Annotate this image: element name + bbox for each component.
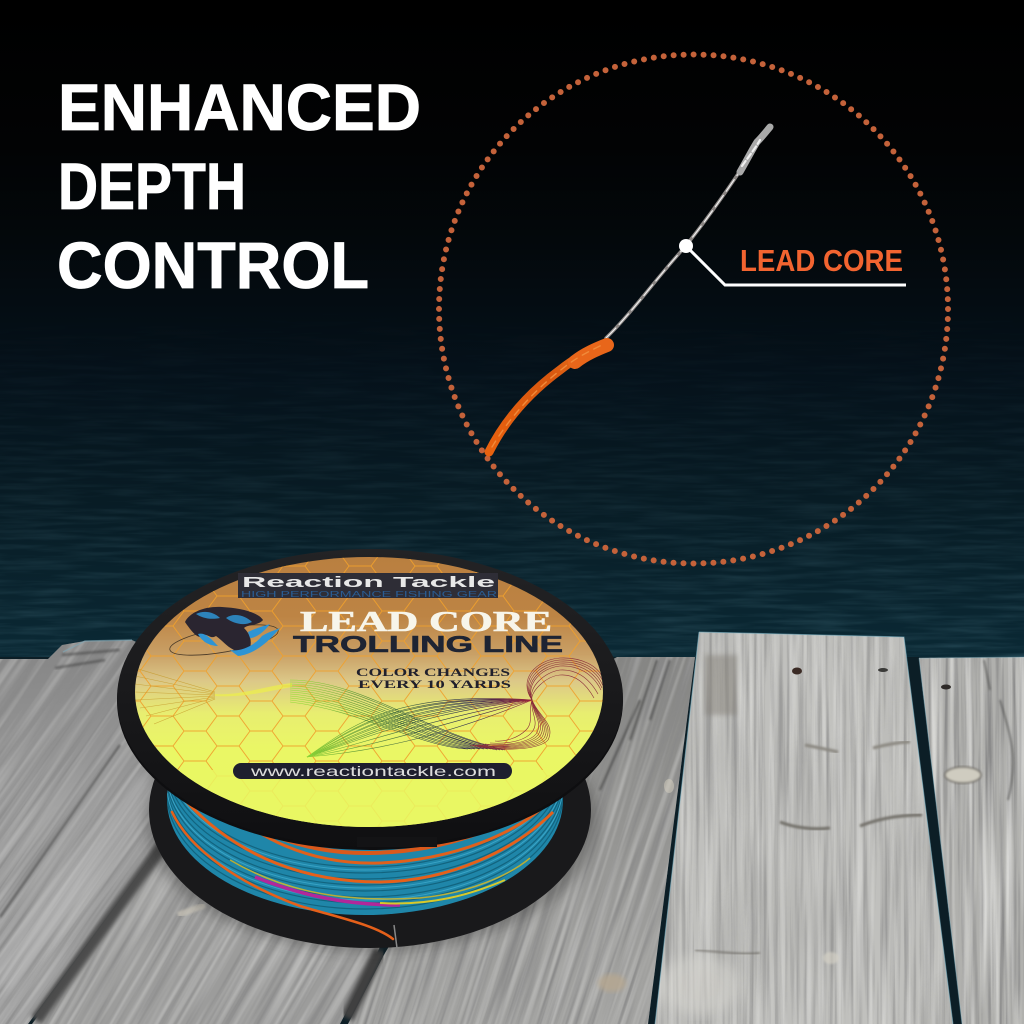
- website pill: [233, 763, 512, 779]
- brand band: [238, 573, 498, 599]
- product name: LEAD CORE: [300, 607, 552, 638]
- plank: lower centre-right: [348, 657, 695, 1024]
- spool label: [135, 557, 604, 827]
- product subtitle: TROLLING LINE: [293, 631, 563, 657]
- windings: [167, 790, 563, 940]
- brand band: Reaction Tackle: [242, 574, 495, 591]
- callout: lead core: LEAD CORE: [740, 243, 903, 278]
- icon: bass fish logo: [168, 607, 280, 661]
- dotted magnifier circle: [439, 54, 948, 564]
- brand band: HIGH PERFORMANCE FISHING GEAR: [241, 590, 497, 599]
- wooden dock: [0, 630, 1024, 1024]
- title: ENHANCED: [58, 70, 421, 144]
- plank gaps: [36, 632, 1024, 1024]
- spool of trolling line: [117, 549, 623, 952]
- plank: left: [0, 640, 260, 1024]
- plank: right centre: [650, 630, 960, 1024]
- callout: lead core: [679, 239, 906, 285]
- shadow: [146, 692, 598, 952]
- background: night ocean: [0, 202, 1024, 657]
- feature note: EVERY 10 YARDS: [358, 679, 511, 691]
- plank: far right: [915, 657, 1024, 1024]
- plank: lower centre-left: [32, 700, 470, 1024]
- feature note: COLOR CHANGES: [356, 667, 510, 679]
- honeycomb pattern: [135, 557, 603, 827]
- lower flange: [149, 672, 591, 948]
- upper flange: [117, 549, 623, 850]
- title: CONTROL: [57, 228, 369, 302]
- illustration: lead core strand: [489, 127, 770, 452]
- feature note: [356, 667, 511, 691]
- wave graphic: [135, 658, 604, 757]
- title: DEPTH: [58, 149, 246, 223]
- website pill: www.reactiontackle.com: [249, 763, 496, 779]
- title: [57, 70, 421, 302]
